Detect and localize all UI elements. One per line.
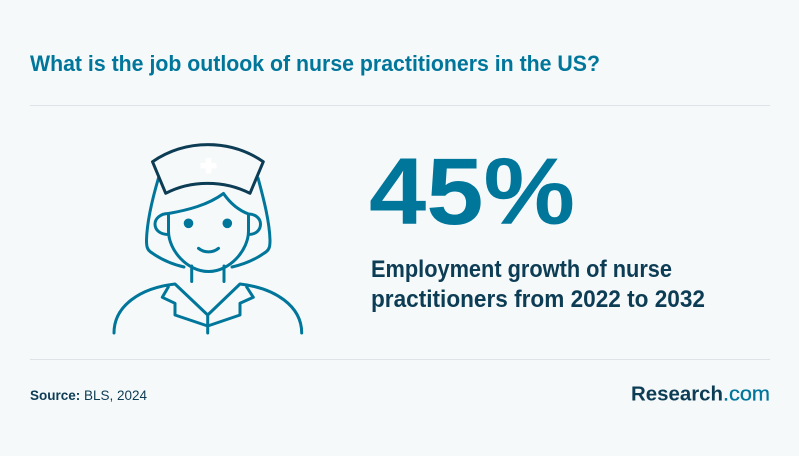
nurse neck	[192, 266, 224, 282]
big percentage: 45%	[369, 139, 575, 245]
statistic description: practitioners from 2022 to 2032	[371, 286, 705, 313]
logo: .com	[723, 382, 770, 406]
cap cross	[200, 158, 216, 174]
nurse smile	[198, 248, 218, 252]
nurse shoulders and collar	[114, 284, 302, 333]
nurse cap	[152, 145, 263, 193]
logo: Research	[631, 382, 723, 406]
title: What is the job outlook of nurse practitioners in the US?	[30, 51, 600, 76]
statistic description	[371, 256, 705, 313]
nurse face	[168, 194, 248, 272]
nurse ears	[155, 214, 260, 234]
icon: nurse	[114, 145, 302, 333]
logo	[631, 382, 770, 406]
nurse hair	[146, 178, 270, 267]
source: Source: BLS, 2024	[30, 388, 147, 403]
statistic description: Employment growth of nurse	[371, 256, 672, 283]
nurse eyes	[184, 218, 232, 228]
